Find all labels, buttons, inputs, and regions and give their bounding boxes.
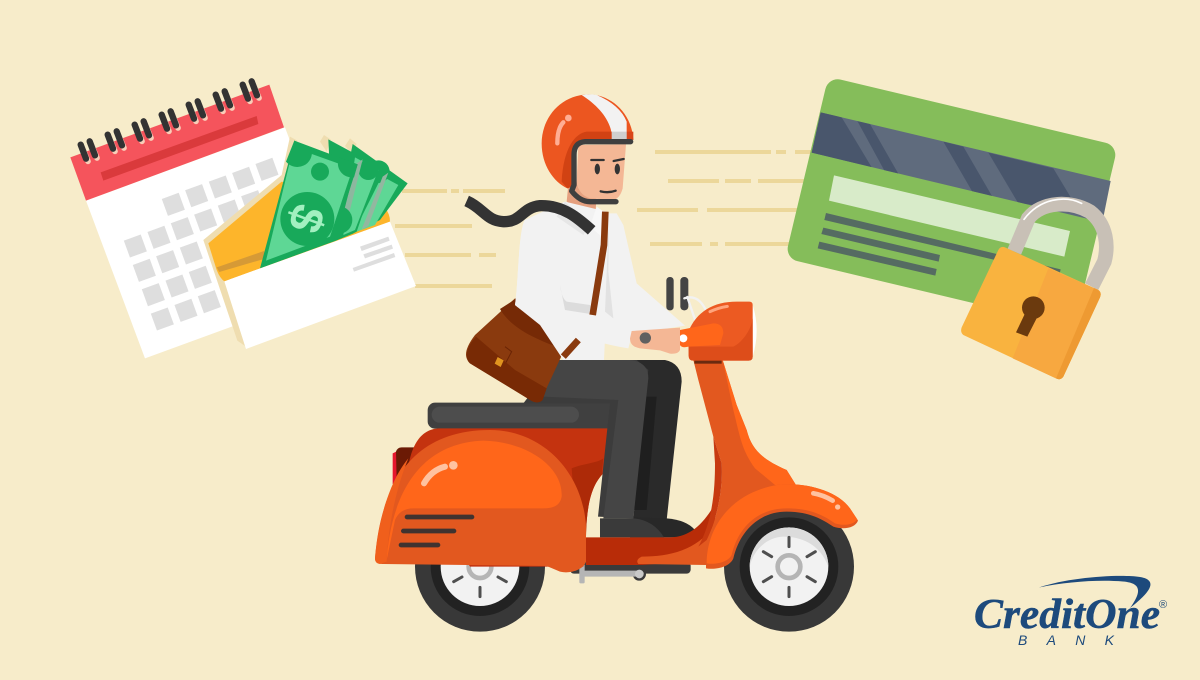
- envelope front: [224, 222, 416, 349]
- calendar and envelope with money: [70, 81, 416, 358]
- rear fender: [375, 430, 586, 572]
- steering column: [693, 360, 796, 547]
- logo subtitle: BANK: [1018, 632, 1115, 648]
- front bill: [260, 141, 358, 268]
- seat: [428, 403, 618, 429]
- brake cable: [684, 297, 707, 332]
- back bill: [333, 144, 408, 242]
- helmet strap: [572, 142, 631, 202]
- padlock: [961, 199, 1106, 379]
- scooter headlamp unit: [679, 302, 757, 364]
- middle bill: [324, 139, 385, 242]
- floorboard: [586, 507, 720, 565]
- speed lines: [395, 152, 812, 286]
- logo swoosh: [1039, 576, 1150, 608]
- scooter: [375, 360, 858, 632]
- calendar: [70, 81, 344, 358]
- credit card: [788, 79, 1116, 303]
- envelope back flap: [203, 135, 357, 346]
- neck: [567, 185, 597, 220]
- tail light: [393, 447, 415, 484]
- mirrors: [666, 277, 688, 310]
- far leg: [630, 360, 695, 537]
- underbody and kickstand: [570, 562, 691, 583]
- rear wheel: [415, 502, 545, 632]
- logo wordmark: CreditOne: [974, 592, 1160, 638]
- credit card with padlock: [785, 77, 1118, 379]
- near leg: [523, 360, 664, 537]
- Credit One Bank logo: [974, 576, 1167, 648]
- dollar sign: $: [278, 198, 336, 240]
- rider: [466, 94, 757, 402]
- helmet: [542, 94, 633, 188]
- registered mark: ®: [1159, 599, 1167, 611]
- shirt: [515, 202, 685, 360]
- under-seat body: [408, 428, 608, 567]
- envelope inside: [208, 182, 390, 281]
- bag strap: [563, 212, 605, 357]
- face: [573, 144, 626, 202]
- front fender: [706, 484, 858, 569]
- illustration scene: [70, 78, 1167, 645]
- front wheel: [724, 502, 854, 632]
- messenger bag: [466, 298, 565, 402]
- tie: [467, 201, 592, 230]
- hand: [630, 328, 680, 354]
